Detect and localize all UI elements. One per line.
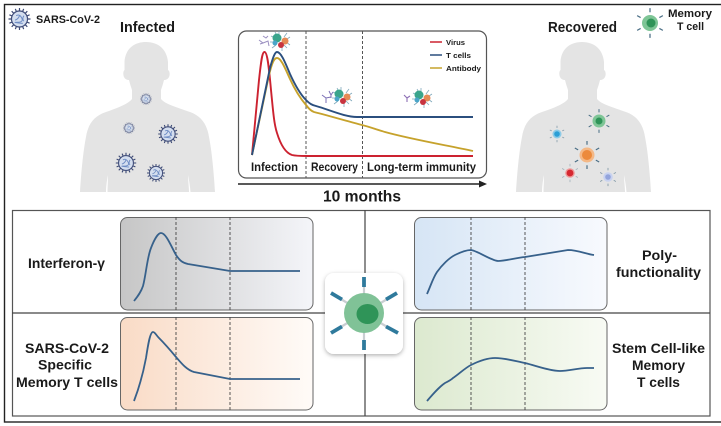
curve: T cells bbox=[252, 52, 473, 155]
panel: Stem cell-like memory T cells bbox=[414, 317, 706, 410]
red memory cell bbox=[562, 164, 578, 182]
nucleus bbox=[356, 304, 378, 324]
label: Poly-functionality: functionality bbox=[616, 265, 702, 280]
label: SARS-CoV-2 specific memory T cells: Memory T cells bbox=[16, 375, 118, 390]
panel: main timeline chart bbox=[238, 31, 486, 178]
curve: Interferon-gamma bbox=[134, 233, 300, 301]
legend label: SARS-CoV-2: SARS-CoV-2 bbox=[36, 14, 100, 26]
body silhouette: recovered bbox=[516, 42, 651, 192]
curve: stem cell-like memory bbox=[427, 358, 594, 401]
label: stem cell-like memory T cells: Memory bbox=[632, 358, 686, 373]
legend: Antibody bbox=[446, 64, 482, 73]
panel: lower grid bbox=[12, 210, 710, 416]
blue memory cell bbox=[550, 126, 564, 142]
icon: memory T cell bbox=[637, 8, 663, 38]
green memory cell bbox=[589, 109, 609, 133]
icon: virus legend bbox=[8, 8, 30, 30]
label: SARS-CoV-2 specific memory T cells: Specific bbox=[38, 358, 93, 372]
figure: recovered body with memory cells bbox=[516, 42, 651, 192]
label: stem cell-like memory T cells: Stem Cell-like bbox=[612, 341, 706, 356]
legend label: Memory T cell bbox=[668, 8, 713, 33]
panel: SARS-CoV-2 specific memory T cells bbox=[16, 317, 313, 410]
antibody and cell clusters bbox=[259, 31, 432, 108]
label: SARS-CoV-2 specific memory T cells bbox=[16, 341, 118, 390]
curve: poly-functionality bbox=[427, 250, 594, 294]
legend: T cells bbox=[446, 51, 471, 60]
legend label: Memory T cell: T cell bbox=[677, 21, 704, 33]
receptors bbox=[331, 277, 398, 350]
legend label: Memory T cell: Memory bbox=[668, 8, 713, 20]
panel: Interferon-gamma bbox=[28, 217, 313, 310]
label: stem cell-like memory T cells: T cells bbox=[637, 375, 680, 390]
legend: Virus bbox=[446, 38, 465, 47]
chart box bbox=[414, 218, 607, 310]
curve: memory T cells bbox=[134, 332, 300, 401]
arrow: timeline bbox=[238, 180, 487, 188]
body silhouette: infected bbox=[80, 42, 215, 192]
legend bbox=[430, 38, 482, 73]
legend: memory T cell bbox=[637, 8, 713, 38]
center card: memory T cell bbox=[325, 273, 403, 354]
lavender memory cell bbox=[600, 168, 616, 186]
heading: Recovered: Recovered bbox=[548, 20, 617, 36]
card background bbox=[325, 273, 403, 354]
panel: Poly-functionality bbox=[414, 217, 702, 310]
figure: infected body with viruses bbox=[80, 42, 215, 192]
label: Interferon-gamma: Interferon-γ bbox=[28, 256, 105, 271]
curve: virus bbox=[252, 52, 473, 156]
chart frame bbox=[238, 31, 486, 178]
legend: SARS-CoV-2 bbox=[8, 8, 100, 30]
chart box bbox=[120, 318, 313, 410]
phase labels: Long-term immunity bbox=[367, 162, 477, 174]
cell body bbox=[344, 293, 384, 333]
phase labels bbox=[251, 162, 477, 174]
chart box bbox=[414, 318, 607, 410]
phase labels: Recovery bbox=[311, 162, 359, 174]
label: SARS-CoV-2 specific memory T cells: SARS-CoV-2 bbox=[25, 341, 109, 356]
chart box bbox=[120, 218, 313, 310]
orange memory cell bbox=[575, 141, 599, 169]
label: Poly-functionality: Poly- bbox=[642, 248, 677, 263]
viruses in body bbox=[116, 93, 178, 182]
label: stem cell-like memory T cells bbox=[612, 341, 706, 390]
label: Poly-functionality bbox=[616, 248, 702, 280]
label: 10 months: 10 months bbox=[323, 188, 401, 206]
heading: Infected: Infected bbox=[120, 20, 175, 36]
phase dividers bbox=[306, 31, 362, 178]
curve: antibody bbox=[252, 58, 473, 155]
grid frame bbox=[12, 210, 710, 416]
phase labels: Infection bbox=[251, 162, 298, 174]
